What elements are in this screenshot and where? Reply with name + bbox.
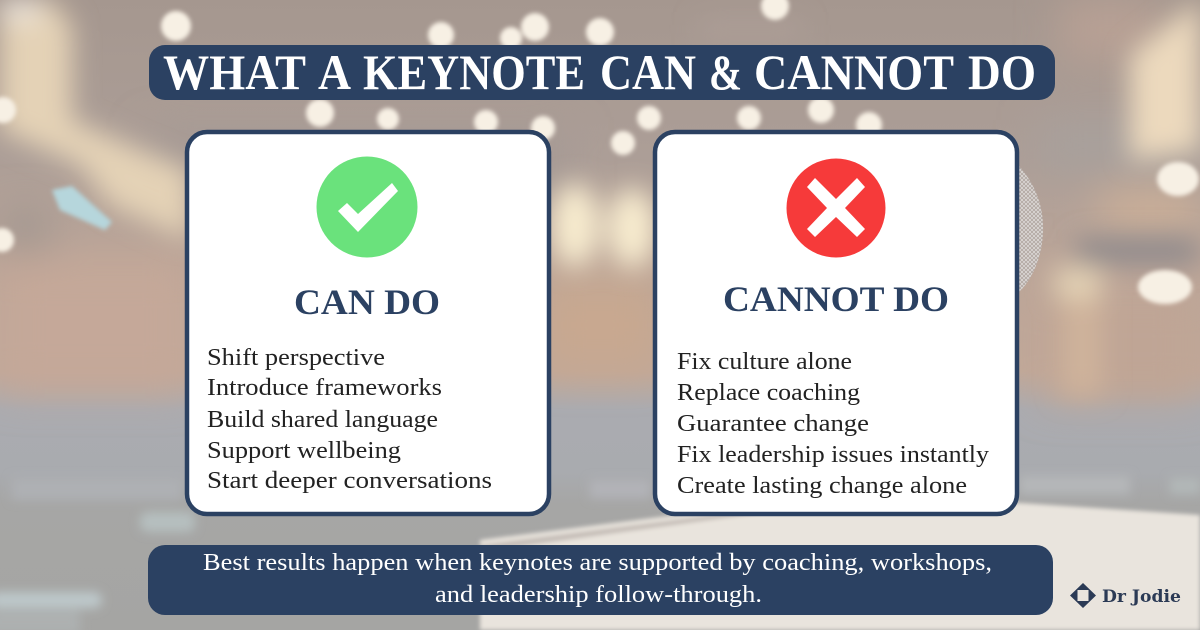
heading: cannot do: CANNOT DO — [723, 279, 949, 319]
title banner: WHAT — [163, 44, 306, 100]
title banner: DO — [968, 44, 1036, 100]
icon: green check — [316, 156, 418, 258]
list: cannot do items: Create lasting change alone — [677, 472, 967, 499]
row strips — [12, 478, 182, 500]
icon: diamond — [1070, 583, 1096, 608]
list: can do items: Shift perspective — [207, 344, 385, 371]
callout: best results: and leadership follow-through. — [435, 582, 762, 608]
list: cannot do items: Fix leadership issues instantly — [677, 441, 990, 468]
list: can do items — [207, 344, 492, 494]
list: can do items: Build shared language — [207, 406, 438, 433]
title banner: CAN — [600, 44, 696, 100]
list: can do items: Support wellbeing — [207, 437, 401, 464]
list: cannot do items: Fix culture alone — [677, 348, 852, 375]
title banner: & — [709, 44, 742, 100]
list: can do items: Start deeper conversations — [207, 467, 492, 494]
icon: red cross — [786, 158, 886, 258]
callout: best results: Best results happen when keynotes are supported by coaching, workshops, — [203, 550, 992, 576]
list: can do items: Introduce frameworks — [207, 374, 442, 401]
title banner: CANNOT — [754, 44, 954, 100]
title banner: A — [318, 44, 351, 100]
title banner: KEYNOTE — [363, 44, 585, 100]
list: cannot do items — [677, 348, 990, 499]
podium — [480, 503, 1200, 630]
heading: can do: CAN DO — [294, 282, 440, 322]
list: cannot do items: Replace coaching — [677, 379, 860, 406]
microphone — [1018, 165, 1043, 293]
logo: Dr Jodie: Dr Jodie — [1102, 587, 1181, 607]
list: cannot do items: Guarantee change — [677, 410, 869, 437]
